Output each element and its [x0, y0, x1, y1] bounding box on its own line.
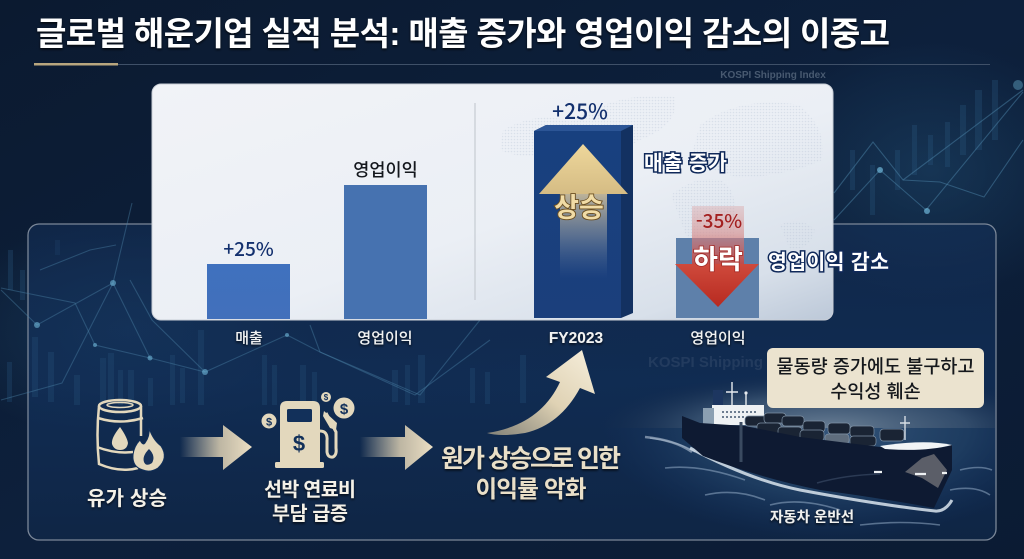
label: margin deterioration: 원가 상승으로 인한	[441, 445, 621, 473]
callout: 수익성 훼손	[830, 381, 921, 402]
icon: oil barrel with flame	[97, 400, 164, 471]
bar: operating profit down	[675, 206, 759, 318]
panel: revenue and operating profit chart	[152, 84, 833, 320]
icon: fuel pump with coins: $	[340, 401, 349, 418]
title: 글로벌 해운기업 실적 분석: 매출 증가와 영업이익 감소의 이중고	[36, 15, 890, 52]
label: operating profit decrease: 영업이익 감소	[768, 251, 889, 274]
label: margin deterioration: 이익률 악화	[476, 476, 586, 502]
icon: car carrier ship	[645, 382, 952, 511]
arrow: down	[675, 264, 759, 307]
icon: fuel pump with coins: $	[324, 393, 329, 402]
label: fuel cost surge: 선박 연료비	[264, 479, 356, 501]
title rule	[34, 63, 990, 66]
arrow: fuel to margin	[360, 425, 433, 470]
bar: operating profit	[344, 157, 427, 319]
callout	[767, 348, 984, 408]
label: fuel cost surge	[264, 479, 356, 525]
x-axis labels: 영업이익	[357, 330, 413, 347]
bar: operating profit: 영업이익	[353, 157, 418, 182]
bar: operating profit down: 하락	[693, 238, 743, 277]
panel: cost pressure flow	[1, 203, 996, 540]
bar: revenue	[207, 235, 290, 319]
hull	[682, 416, 952, 508]
x-axis labels: 매출	[235, 330, 263, 347]
label: revenue increase: 매출 증가	[644, 152, 727, 175]
caption: car carrier: 자동차 운반선	[770, 506, 854, 527]
bar: FY2023 revenue up: +25%	[552, 96, 608, 126]
watermark: KOSPI Shipping Index: KOSPI Shipping Index	[720, 70, 826, 81]
arrow: curved to chart	[487, 350, 595, 435]
world map dots	[500, 96, 823, 280]
callout: 물동량 증가에도 불구하고	[776, 356, 974, 377]
icon: fuel pump with coins: $	[266, 416, 272, 428]
divider	[474, 103, 476, 300]
x-axis labels: 영업이익	[690, 330, 746, 347]
bar: operating profit down: -35%	[696, 207, 742, 234]
icon: fuel pump with coins: $	[293, 431, 305, 456]
label: fuel cost surge: 부담 급증	[272, 503, 348, 525]
label: margin deterioration	[441, 445, 621, 502]
arrow: oil to fuel	[180, 425, 252, 470]
x-axis labels	[235, 330, 746, 347]
icon: fuel pump with coins	[262, 392, 354, 468]
label: oil price rise: 유가 상승	[87, 487, 167, 510]
superstructure	[703, 382, 764, 426]
watermark: KOSPI Shipping: KOSPI Shipping In	[648, 354, 780, 371]
panel: ship scene	[600, 318, 995, 539]
arrow: up	[539, 144, 628, 278]
bar: revenue: +25%	[223, 235, 274, 262]
cars on deck	[745, 413, 904, 446]
x-axis labels: FY2023	[549, 330, 604, 347]
bar: FY2023 revenue up	[534, 96, 633, 318]
bar: FY2023 revenue up: 상승	[554, 186, 604, 225]
